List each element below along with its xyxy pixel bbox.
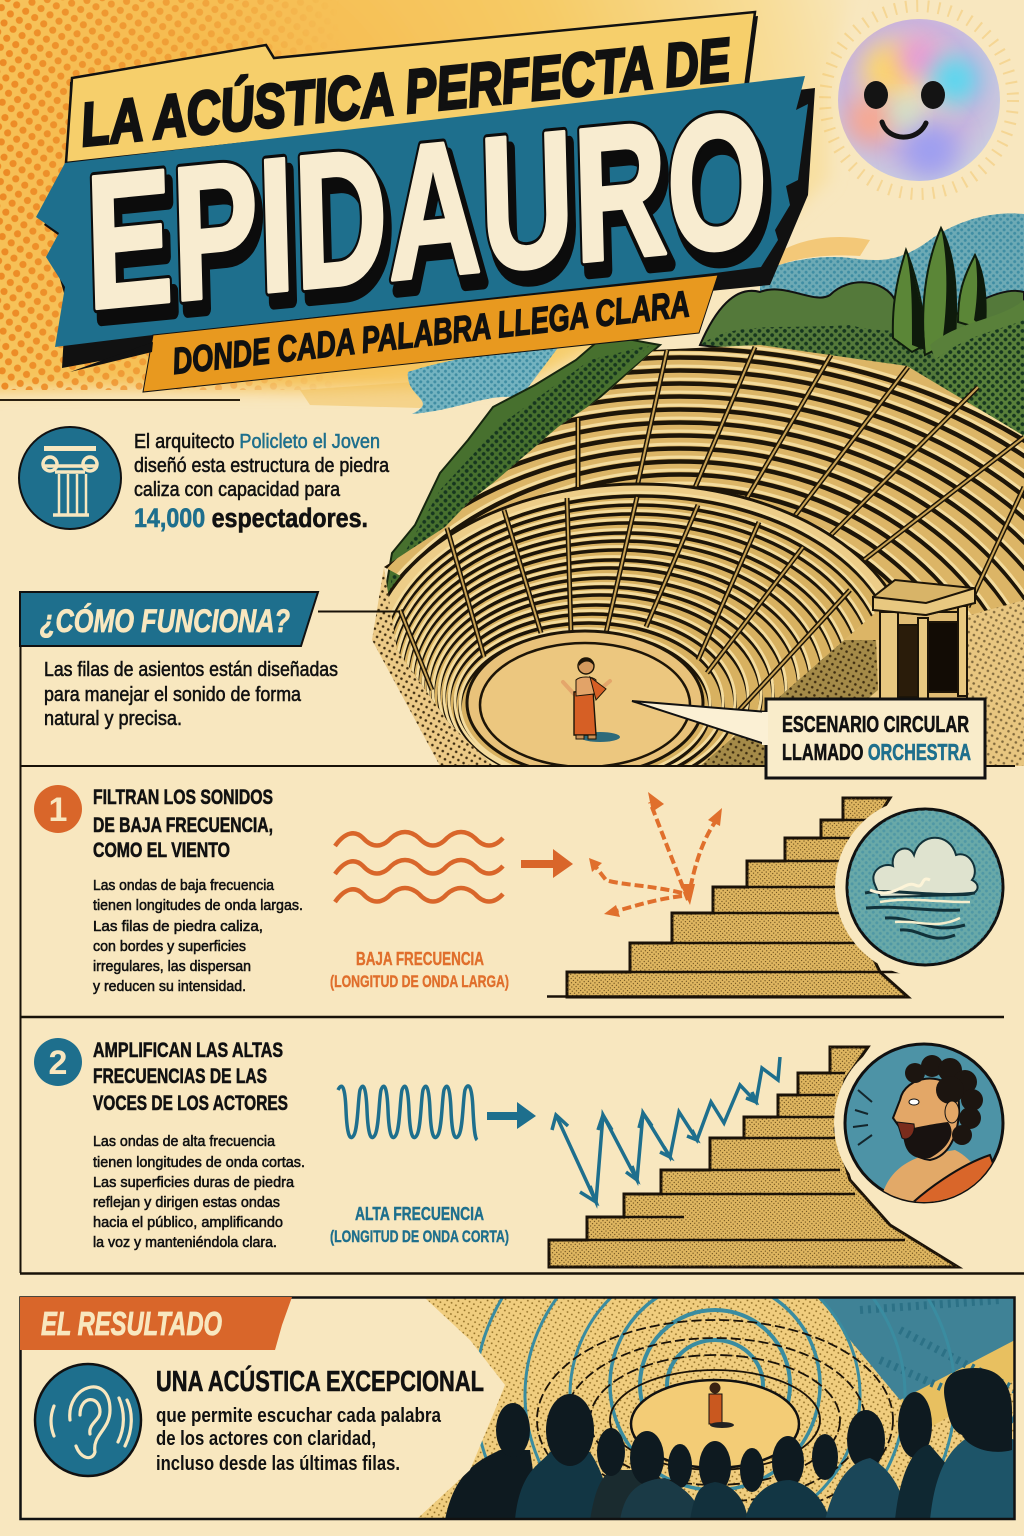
actor in orange robe	[563, 658, 620, 742]
step 1 heading: FILTRAN LOS SONIDOS	[93, 786, 273, 809]
intro text: 14,000 espectadores.	[134, 503, 368, 533]
banner: el resultado	[20, 1297, 292, 1350]
title banner: upper yellow strip	[66, 12, 758, 168]
cypress trees	[893, 228, 986, 355]
cómo funciona text: para manejar el sonido de forma	[44, 684, 302, 706]
low frequency label: BAJA FRECUENCIA	[356, 949, 484, 969]
step 1 heading: COMO EL VIENTO	[93, 839, 230, 862]
subtitle text: DONDE CADA PALABRA LLEGA CLARA	[170, 283, 692, 382]
step 2 body: tienen longitudes de onda cortas.	[93, 1154, 305, 1171]
cómo funciona text: Las filas de asientos están diseñadas	[44, 659, 338, 681]
landscape: sky and hills	[384, 213, 1024, 600]
high frequency wave	[338, 1086, 477, 1140]
callout: orchestra: LLAMADO ORCHESTRA	[782, 739, 971, 765]
step 2 body: reflejan y dirigen estas ondas	[93, 1194, 280, 1211]
title banner: blue strip with EPIDAURO	[36, 72, 815, 368]
arrow: low frequency	[521, 849, 573, 878]
banner: cómo funciona: ¿CÓMO FUNCIONA?	[40, 603, 290, 639]
small actor	[709, 1382, 734, 1428]
step 2 body	[93, 1133, 305, 1251]
zigzag reflecting arrows	[552, 1057, 780, 1202]
step 1 number: 1	[49, 791, 67, 829]
step 1 body: irregulares, las dispersan	[93, 958, 251, 975]
step 2 number	[34, 1038, 82, 1086]
intro: icon column	[19, 427, 121, 529]
step 1 body: Las ondas de baja frecuencia	[93, 877, 275, 894]
sand ground	[372, 567, 1024, 766]
low frequency label	[330, 949, 509, 991]
step 2 heading: AMPLIFICAN LAS ALTAS	[93, 1039, 283, 1062]
title line one: LA ACÚSTICA PERFECTA DE	[77, 25, 735, 159]
step 2 heading: FRECUENCIAS DE LAS	[93, 1065, 267, 1088]
result illustration	[418, 1298, 1014, 1518]
cómo funciona text: natural y precisa.	[44, 708, 182, 730]
step 2 heading: VOCES DE LOS ACTORES	[93, 1092, 288, 1115]
audience silhouettes	[445, 1368, 1015, 1520]
step 2 number: 2	[49, 1044, 67, 1082]
high frequency label	[330, 1204, 509, 1246]
step 2 body: Las superficies duras de piedra	[93, 1174, 295, 1191]
step 1 heading: DE BAJA FRECUENCIA,	[93, 814, 273, 837]
lower aisles	[400, 497, 850, 715]
step 1 heading	[93, 786, 273, 862]
intro text: El arquitecto Policleto el Joven	[134, 431, 380, 453]
result text: incluso desde las últimas filas.	[156, 1453, 400, 1475]
icon: speaking actor	[834, 1042, 1004, 1204]
orchestra stage	[467, 631, 703, 775]
low frequency waves	[335, 832, 503, 902]
parodos gate	[873, 580, 975, 707]
step 1 body: con bordes y superficies	[93, 938, 246, 955]
result text: que permite escuchar cada palabra	[156, 1405, 442, 1427]
scattered dashed arrows	[595, 802, 718, 912]
stairs: high frequency	[549, 1047, 958, 1267]
step 2 body: la voz y manteniéndola clara.	[93, 1234, 277, 1251]
step 1 body: tienen longitudes de onda largas.	[93, 897, 303, 914]
intro text: diseñó esta estructura de piedra	[134, 455, 390, 477]
upper seating	[384, 345, 1024, 640]
upper aisles	[578, 347, 1024, 607]
result frame	[20, 1298, 1014, 1519]
arrow: high frequency	[487, 1102, 536, 1129]
step 1 number	[34, 785, 82, 833]
icon: ear	[35, 1364, 141, 1476]
icon: wind cloud	[835, 806, 1004, 974]
result text	[156, 1405, 442, 1475]
header background	[0, 0, 860, 408]
cómo funciona text	[44, 659, 338, 730]
step 1 body: Las filas de piedra caliza,	[93, 918, 263, 935]
result heading: UNA ACÚSTICA EXCEPCIONAL	[156, 1364, 484, 1398]
result text: de los actores con claridad,	[156, 1428, 376, 1450]
step 2 body: hacia el público, amplificando	[93, 1214, 283, 1231]
theatre illustration	[372, 345, 1024, 766]
icon: iridescent smiling orb	[825, 6, 1013, 194]
green hill behind the seating	[700, 282, 1024, 450]
step 1 body: y reducen su intensidad.	[93, 978, 246, 995]
high frequency label: ALTA FRECUENCIA	[355, 1204, 484, 1224]
low frequency label: (LONGITUD DE ONDA LARGA)	[330, 972, 509, 991]
stairs: low frequency	[547, 798, 908, 997]
callout: orchestra	[632, 699, 985, 778]
banner: cómo funciona	[20, 592, 318, 646]
high frequency label: (LONGITUD DE ONDA CORTA)	[330, 1227, 509, 1246]
subtitle orange strip	[70, 275, 718, 392]
step 2 body: Las ondas de alta frecuencia	[93, 1133, 276, 1150]
step 1 body	[93, 877, 303, 995]
diazoma band and lower seating	[388, 482, 887, 765]
panel: result	[19, 1296, 1016, 1520]
step 2 heading	[93, 1039, 288, 1115]
intro text: caliza con capacidad para	[134, 479, 341, 501]
intro text	[134, 431, 390, 533]
arrowheads	[589, 792, 722, 917]
banner: el resultado: EL RESULTADO	[41, 1305, 222, 1342]
frame lines	[20, 612, 1024, 1274]
